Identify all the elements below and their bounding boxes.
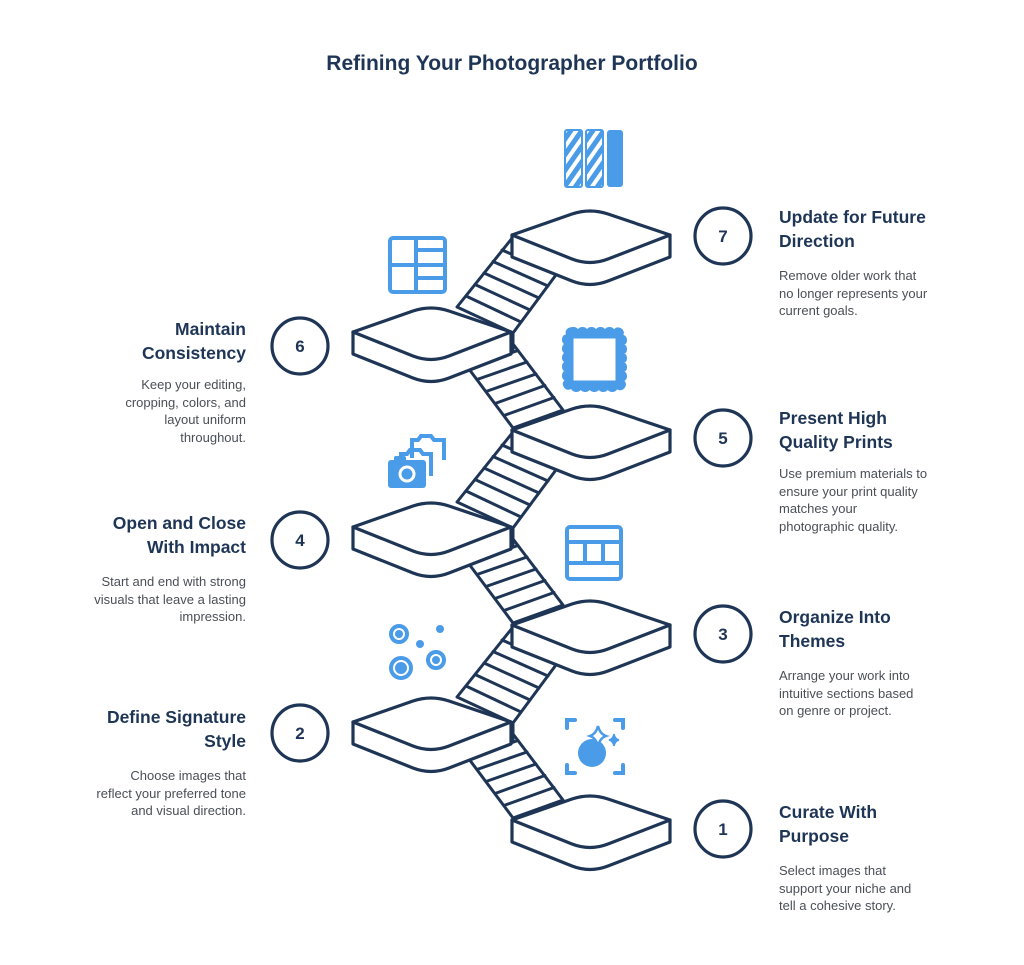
step 6 text: throughout.: [180, 430, 246, 444]
icon: scalloped frame: [567, 332, 622, 387]
step 2 text: and visual direction.: [131, 803, 246, 818]
step 1 text: Select images that: [779, 863, 886, 878]
step 5 text: photographic quality.: [779, 518, 898, 534]
title: Refining Your Photographer Portfolio: [326, 52, 698, 75]
platform 5: [512, 406, 670, 480]
icon: table: [567, 527, 621, 579]
step 6 text: cropping, colors, and: [125, 394, 246, 410]
step 1 text: tell a cohesive story.: [779, 898, 896, 913]
step 7 text: Remove older work that: [779, 268, 916, 283]
platform 4: [353, 503, 511, 576]
step 6 text: Maintain: [175, 319, 246, 339]
step 1 text: [779, 802, 911, 913]
step 5 text: Quality Prints: [779, 432, 893, 452]
number circles: 5: [718, 429, 728, 448]
icon: grid: [390, 238, 445, 292]
step 4 text: visuals that leave a lasting: [94, 592, 246, 606]
step 3 text: on genre or project.: [779, 703, 892, 718]
step 6 text: [125, 319, 246, 444]
step 5 text: ensure your print quality: [779, 484, 918, 498]
step 4 text: Start and end with strong: [101, 574, 246, 589]
step 2 text: [96, 707, 246, 818]
step 1 text: Purpose: [779, 826, 849, 846]
icon: stripes: [565, 130, 623, 187]
step 3 text: Arrange your work into: [779, 668, 910, 683]
step 7 text: Direction: [779, 231, 855, 251]
step 5 text: matches your: [779, 501, 857, 516]
platform 7: [512, 211, 670, 284]
step 3 text: intuitive sections based: [779, 686, 913, 700]
step 2 text: Style: [204, 731, 246, 751]
step 3 text: Themes: [779, 631, 845, 651]
number circles: 7: [718, 227, 728, 246]
step 7 text: Update for Future: [779, 207, 926, 227]
step 6 text: Keep your editing,: [141, 377, 246, 392]
step 4 text: [94, 513, 246, 624]
number circles: 4: [295, 531, 305, 550]
icon: sparkle focus: [567, 720, 623, 773]
step 1 text: support your niche and: [779, 880, 911, 896]
number circles: 2: [295, 724, 305, 743]
number circles: 3: [718, 625, 728, 644]
step 6 text: layout uniform: [164, 412, 246, 427]
platform 1: [512, 796, 670, 870]
step 7 text: [779, 207, 927, 318]
stairs flights: [457, 237, 567, 818]
step 1 text: Curate With: [779, 802, 877, 822]
platform 6: [353, 308, 511, 382]
step 6 text: Consistency: [142, 343, 246, 363]
step 3 text: [779, 607, 913, 718]
step 7 text: no longer represents your: [779, 286, 927, 300]
step 4 text: With Impact: [147, 537, 246, 557]
step 4 text: Open and Close: [113, 513, 246, 533]
step 3 text: Organize Into: [779, 607, 891, 627]
step 7 text: current goals.: [779, 303, 858, 318]
number circles: 1: [718, 820, 728, 839]
step 2 text: reflect your preferred tone: [96, 786, 246, 800]
icon: camera stack: [388, 436, 444, 488]
step 5 text: [779, 408, 927, 534]
step 2 text: Choose images that: [130, 768, 246, 783]
number circles: 6: [295, 337, 305, 356]
number circles: [272, 208, 751, 857]
platform 2: [353, 698, 511, 772]
step 4 text: impression.: [180, 609, 246, 624]
step 5 text: Use premium materials to: [779, 466, 927, 481]
icon: circles: [391, 625, 444, 678]
platform 3: [512, 601, 670, 674]
step 2 text: Define Signature: [107, 707, 246, 727]
step 5 text: Present High: [779, 408, 887, 428]
